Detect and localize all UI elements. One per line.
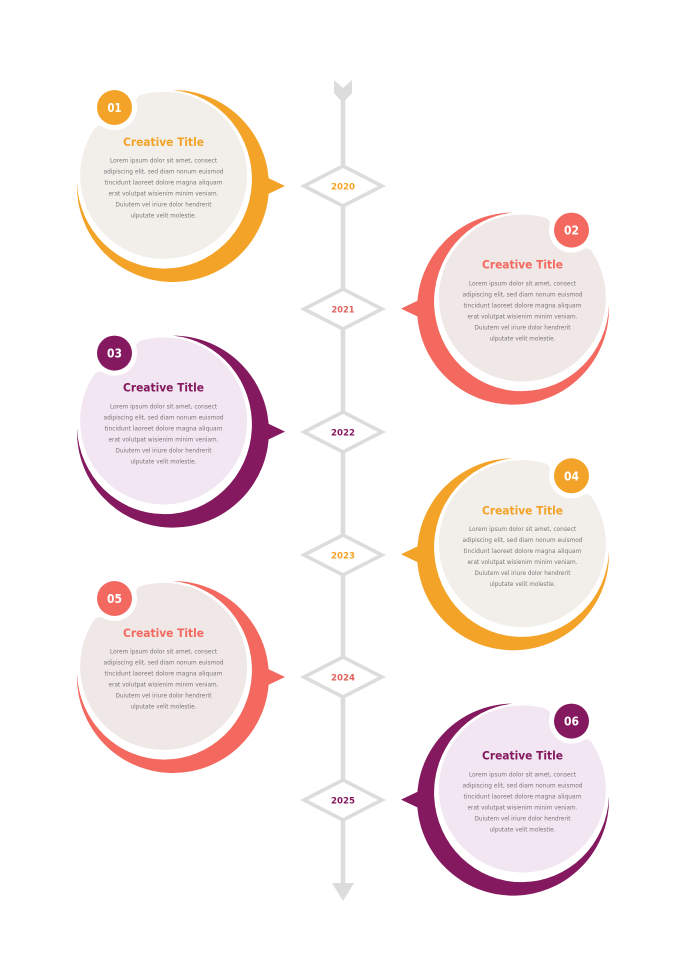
badge number: 05: [107, 591, 122, 606]
body text: tincidunt laoreet dolore magna aliquam: [104, 425, 223, 432]
panel: step 05: [77, 581, 285, 773]
panel: step 06: [401, 704, 609, 896]
body text: Lorem ipsum dolor sit amet, consect: [110, 158, 218, 165]
badge number: 01: [108, 100, 122, 115]
year marker 2022: 2022: [331, 428, 355, 438]
body text: Duiutem vel iriure dolor hendrerit: [116, 693, 212, 700]
body text: tincidunt laoreet dolore magna aliquam: [104, 180, 223, 187]
body text: erat volutpat wisienim minim veniam.: [108, 682, 219, 689]
body text: Duiutem vel iriure dolor hendrerit: [474, 815, 571, 822]
year marker 2023: [300, 533, 386, 577]
panel: step 02: [401, 213, 609, 405]
badge number: 03: [107, 346, 122, 361]
crescent with pointer: [77, 581, 285, 773]
content blob: [80, 92, 247, 259]
number badge: [97, 336, 132, 371]
number badge: [554, 704, 589, 739]
body text: Lorem ipsum dolor sit amet, consect: [469, 280, 577, 287]
body text: [104, 403, 224, 465]
body text: ulputate velit molestie.: [490, 335, 556, 342]
body text: Duiutem vel iriure dolor hendrerit: [116, 447, 212, 454]
body text: adipiscing elit, sed diam nonum euismod: [104, 414, 224, 421]
card title: Creative Title: [482, 749, 563, 763]
arrow head at bottom: [332, 883, 354, 901]
body text: tincidunt laoreet dolore magna aliquam: [104, 671, 223, 678]
body text: tincidunt laoreet dolore magna aliquam: [464, 793, 582, 800]
timeline axis: [332, 80, 354, 901]
crescent with pointer: [77, 90, 285, 282]
card title: Creative Title: [123, 381, 204, 395]
body text: Lorem ipsum dolor sit amet, consect: [110, 649, 218, 656]
body text: [462, 280, 583, 342]
content blob: [439, 214, 606, 381]
body text: erat volutpat wisienim minim veniam.: [468, 559, 578, 566]
body text: Duiutem vel iriure dolor hendrerit: [474, 570, 571, 577]
body text: ulputate velit molestie.: [130, 213, 197, 220]
crescent with pointer: [77, 336, 285, 528]
body text: adipiscing elit, sed diam nonum euismod: [104, 169, 224, 176]
body text: Lorem ipsum dolor sit amet, consect: [469, 526, 577, 533]
number badge: [97, 90, 132, 125]
badge number: 02: [564, 223, 579, 238]
body text: erat volutpat wisienim minim veniam.: [468, 804, 578, 811]
card title: Creative Title: [482, 503, 563, 517]
year marker 2021: [300, 287, 386, 331]
card title: Creative Title: [123, 626, 204, 640]
year marker 2023: 2023: [331, 551, 355, 561]
year marker 2020: 2020: [331, 182, 355, 192]
year marker 2024: 2024: [331, 673, 355, 683]
body text: ulputate velit molestie.: [490, 826, 556, 833]
body text: Duiutem vel iriure dolor hendrerit: [116, 202, 212, 209]
crescent with pointer: [401, 458, 609, 650]
card title: Creative Title: [123, 135, 204, 149]
body text: [462, 771, 583, 833]
body text: erat volutpat wisienim minim veniam.: [108, 191, 219, 198]
number badge: [554, 213, 589, 248]
body text: adipiscing elit, sed diam nonum euismod: [462, 537, 583, 544]
arrow fletching at top: [334, 80, 352, 103]
card title: Creative Title: [482, 258, 563, 272]
content blob: [439, 705, 606, 872]
body text: [462, 526, 583, 588]
body text: Duiutem vel iriure dolor hendrerit: [474, 324, 571, 331]
body text: [104, 158, 224, 220]
body text: adipiscing elit, sed diam nonum euismod: [462, 782, 583, 789]
body text: ulputate velit molestie.: [130, 704, 197, 711]
year marker 2025: [300, 778, 386, 822]
axis line: [341, 95, 345, 887]
body text: ulputate velit molestie.: [130, 458, 197, 465]
content blob: [439, 460, 606, 627]
panel: step 03: [77, 336, 285, 528]
body text: erat volutpat wisienim minim veniam.: [108, 436, 219, 443]
content blob: [80, 583, 247, 750]
crescent with pointer: [401, 704, 609, 896]
body text: Lorem ipsum dolor sit amet, consect: [110, 403, 218, 410]
body text: ulputate velit molestie.: [490, 581, 556, 588]
body text: adipiscing elit, sed diam nonum euismod: [462, 291, 583, 298]
year marker 2022: [300, 410, 386, 454]
body text: adipiscing elit, sed diam nonum euismod: [104, 660, 224, 667]
panel: step 01: [77, 90, 285, 282]
body text: erat volutpat wisienim minim veniam.: [468, 313, 578, 320]
badge number: 04: [564, 468, 579, 483]
crescent with pointer: [401, 213, 609, 405]
panel: step 04: [401, 458, 609, 650]
year marker 2021: 2021: [332, 305, 354, 315]
year marker 2025: 2025: [331, 796, 355, 806]
year marker 2024: [300, 655, 386, 699]
number badge: [554, 458, 589, 493]
body text: [104, 649, 224, 711]
year marker 2020: [300, 164, 386, 208]
body text: Lorem ipsum dolor sit amet, consect: [469, 771, 577, 778]
badge number: 06: [564, 714, 579, 729]
content blob: [80, 337, 247, 504]
body text: tincidunt laoreet dolore magna aliquam: [464, 302, 582, 309]
body text: tincidunt laoreet dolore magna aliquam: [464, 548, 582, 555]
number badge: [97, 581, 132, 616]
